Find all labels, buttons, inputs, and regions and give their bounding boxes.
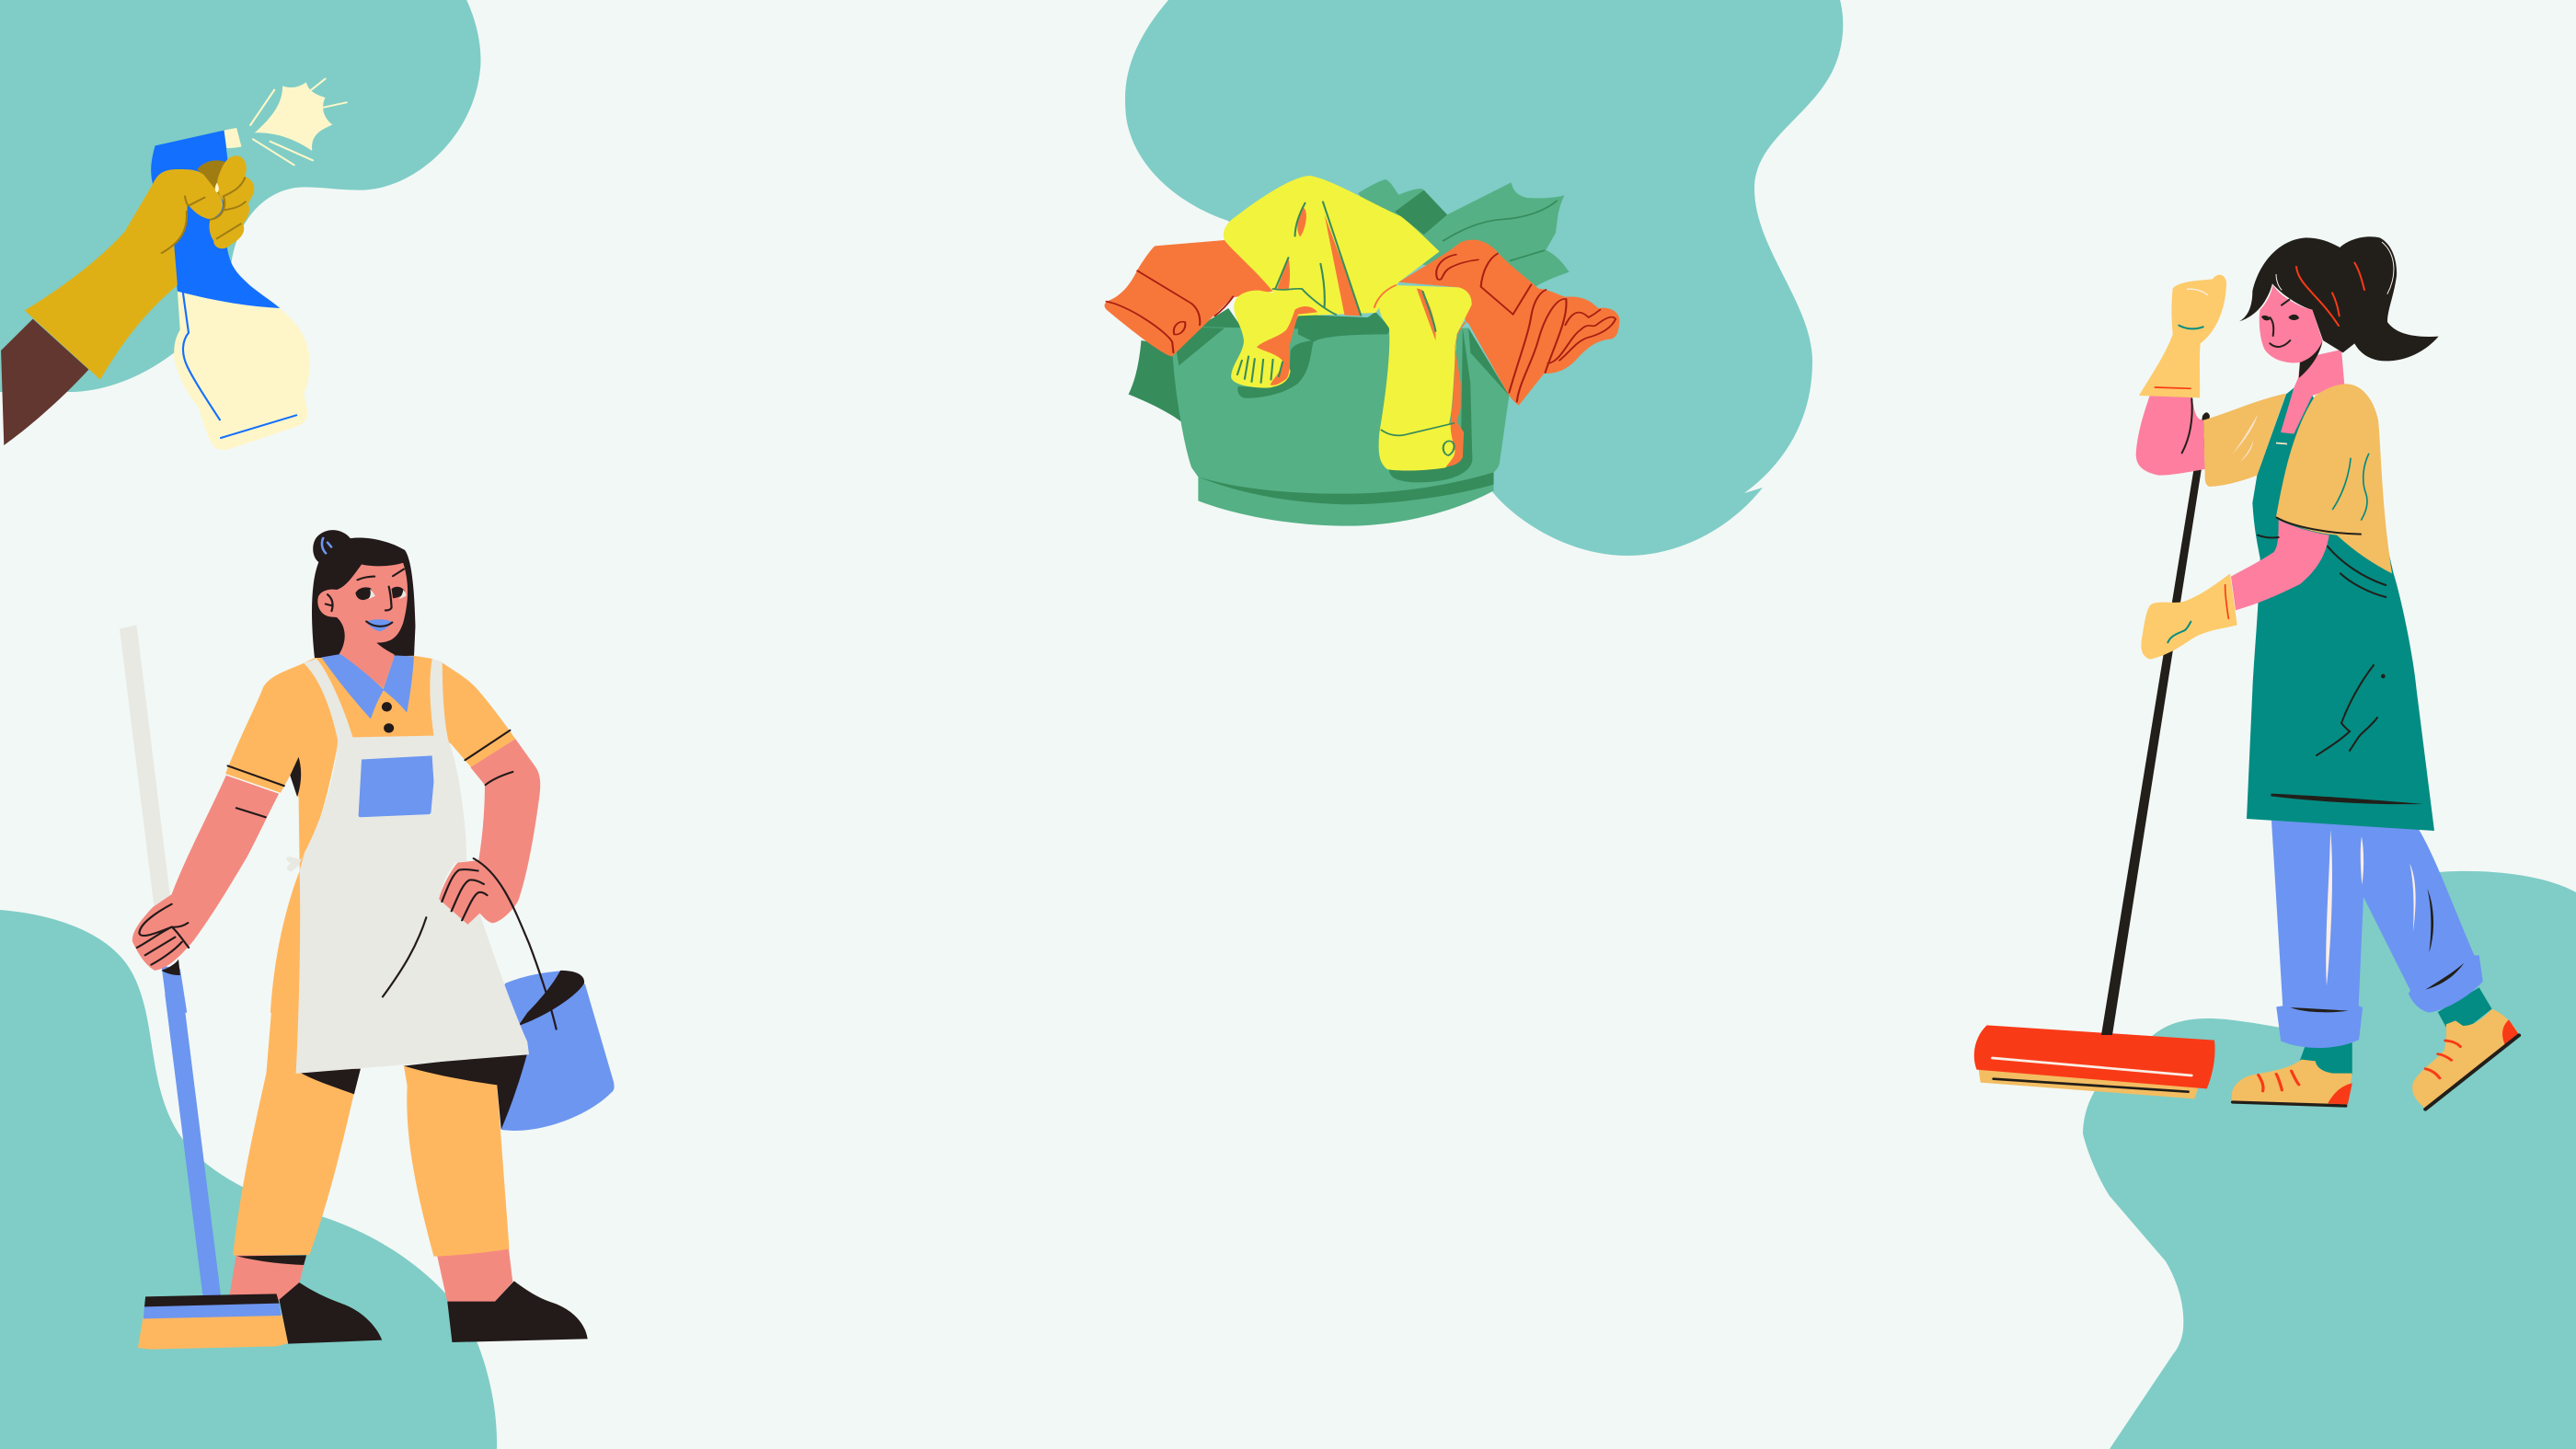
sleeve teal lines [2333, 454, 2369, 520]
shoe right [447, 1281, 588, 1342]
apron [296, 659, 529, 1074]
pocket [359, 755, 433, 817]
bottle outline strokes [183, 293, 296, 438]
icon: spray burst [250, 79, 347, 165]
eyes [355, 587, 406, 600]
arm right [439, 739, 540, 925]
glove bottom [2141, 573, 2237, 660]
sleeve stitches [1237, 356, 1282, 383]
yellow shirt [1224, 176, 1440, 316]
woman with mop [1974, 236, 2519, 1110]
back cloth creases [1443, 201, 1557, 260]
sock left [2300, 1042, 2352, 1075]
apron tie [286, 852, 305, 872]
long sleeve details [1381, 292, 1455, 455]
teal blob: top centre [1125, 0, 1843, 556]
yellow shadow [1237, 340, 1314, 398]
arm left [132, 776, 279, 971]
forearm front [2231, 520, 2329, 610]
basket body [1172, 325, 1509, 526]
basket rim shadow right [1468, 328, 1509, 396]
spray bottle in gloved hand [1, 79, 347, 450]
leg right skin [437, 1248, 512, 1302]
trouser left [233, 991, 361, 1255]
trigger shadow [197, 160, 226, 196]
shoulder sleeve [2276, 384, 2392, 573]
basket clothes shadow right [1389, 328, 1472, 482]
sleeve top orange trim [1374, 285, 1396, 307]
mop head [1974, 1025, 2215, 1098]
broom grip shadow [161, 960, 180, 975]
small yellow sleeve [1231, 291, 1310, 388]
face lines and creases [137, 569, 512, 996]
long sleeve orange lining [1417, 288, 1469, 466]
basket rim shadow left [1176, 328, 1225, 365]
broom handle lower [165, 994, 221, 1297]
apron hem crease [2271, 794, 2423, 804]
left back cloth [1129, 340, 1213, 421]
broom handle top [120, 625, 172, 912]
basket inner shadow [1202, 308, 1391, 342]
bucket [497, 971, 615, 1131]
orange garment creases [1436, 254, 1616, 402]
hair highlights [2296, 263, 2364, 326]
shirt torso [225, 656, 515, 1013]
trousers [2271, 821, 2483, 1048]
bucket handle [474, 858, 557, 1029]
broom head [138, 1294, 288, 1350]
basket band [1198, 472, 1494, 504]
orange sleeve left [1105, 240, 1273, 356]
trouser shadows [237, 1052, 528, 1265]
glove fingers [210, 155, 254, 248]
trouser creases [2290, 889, 2464, 1012]
small sleeve orange lining [1257, 306, 1317, 385]
hair [312, 530, 415, 658]
underarm shadow [290, 757, 301, 797]
laundry basket with clothes [1105, 176, 1619, 526]
arm [1, 319, 88, 445]
arm shadow line [2182, 398, 2192, 453]
drop highlight [215, 183, 219, 192]
glove top [2139, 275, 2226, 397]
teal blob: bottom left [0, 910, 497, 1449]
teal blob: bottom right [2083, 871, 2576, 1449]
collar [321, 654, 414, 719]
trouser right [404, 1065, 510, 1257]
lower legs and shoes [1974, 821, 2519, 1110]
nozzle [224, 128, 241, 148]
back clothes [1358, 179, 1570, 290]
apron [2247, 388, 2434, 831]
sleeve creases [1107, 270, 1233, 352]
sprayer head [151, 131, 280, 308]
lower body [138, 991, 588, 1350]
leg left skin [229, 1254, 306, 1300]
back sleeve arm [2136, 396, 2205, 476]
sock right [2438, 987, 2492, 1028]
hair [2239, 236, 2439, 361]
woman with broom and bucket [120, 530, 615, 1350]
shoe left [280, 1282, 382, 1344]
sleeve hem and apron creases [2258, 518, 2386, 755]
teal blob: top left [0, 0, 481, 392]
lips [366, 619, 392, 631]
glove palm [25, 169, 223, 380]
bottle body [174, 292, 310, 450]
mop handle [2101, 412, 2210, 1035]
neck and face [317, 563, 408, 688]
buttons [382, 702, 394, 733]
neck shadow [2299, 341, 2322, 378]
facial features [2270, 300, 2290, 347]
face [2260, 285, 2322, 362]
sleeve back [2203, 394, 2286, 487]
shirt folds [1277, 207, 1362, 316]
long yellow sleeve [1379, 285, 1472, 471]
upper body [132, 530, 557, 1074]
upper body [2136, 236, 2439, 831]
neck and chest [2281, 350, 2344, 434]
broom handle middle [161, 966, 187, 1013]
shoe left [2232, 1060, 2352, 1106]
orange garment right [1398, 240, 1619, 406]
highlights sleeve back [2228, 415, 2287, 462]
apron dot [2381, 674, 2386, 678]
glove creases [162, 178, 246, 253]
trouser highlights [2326, 830, 2416, 986]
shoe right [2412, 1009, 2519, 1110]
back cloth shadow [1395, 190, 1447, 235]
